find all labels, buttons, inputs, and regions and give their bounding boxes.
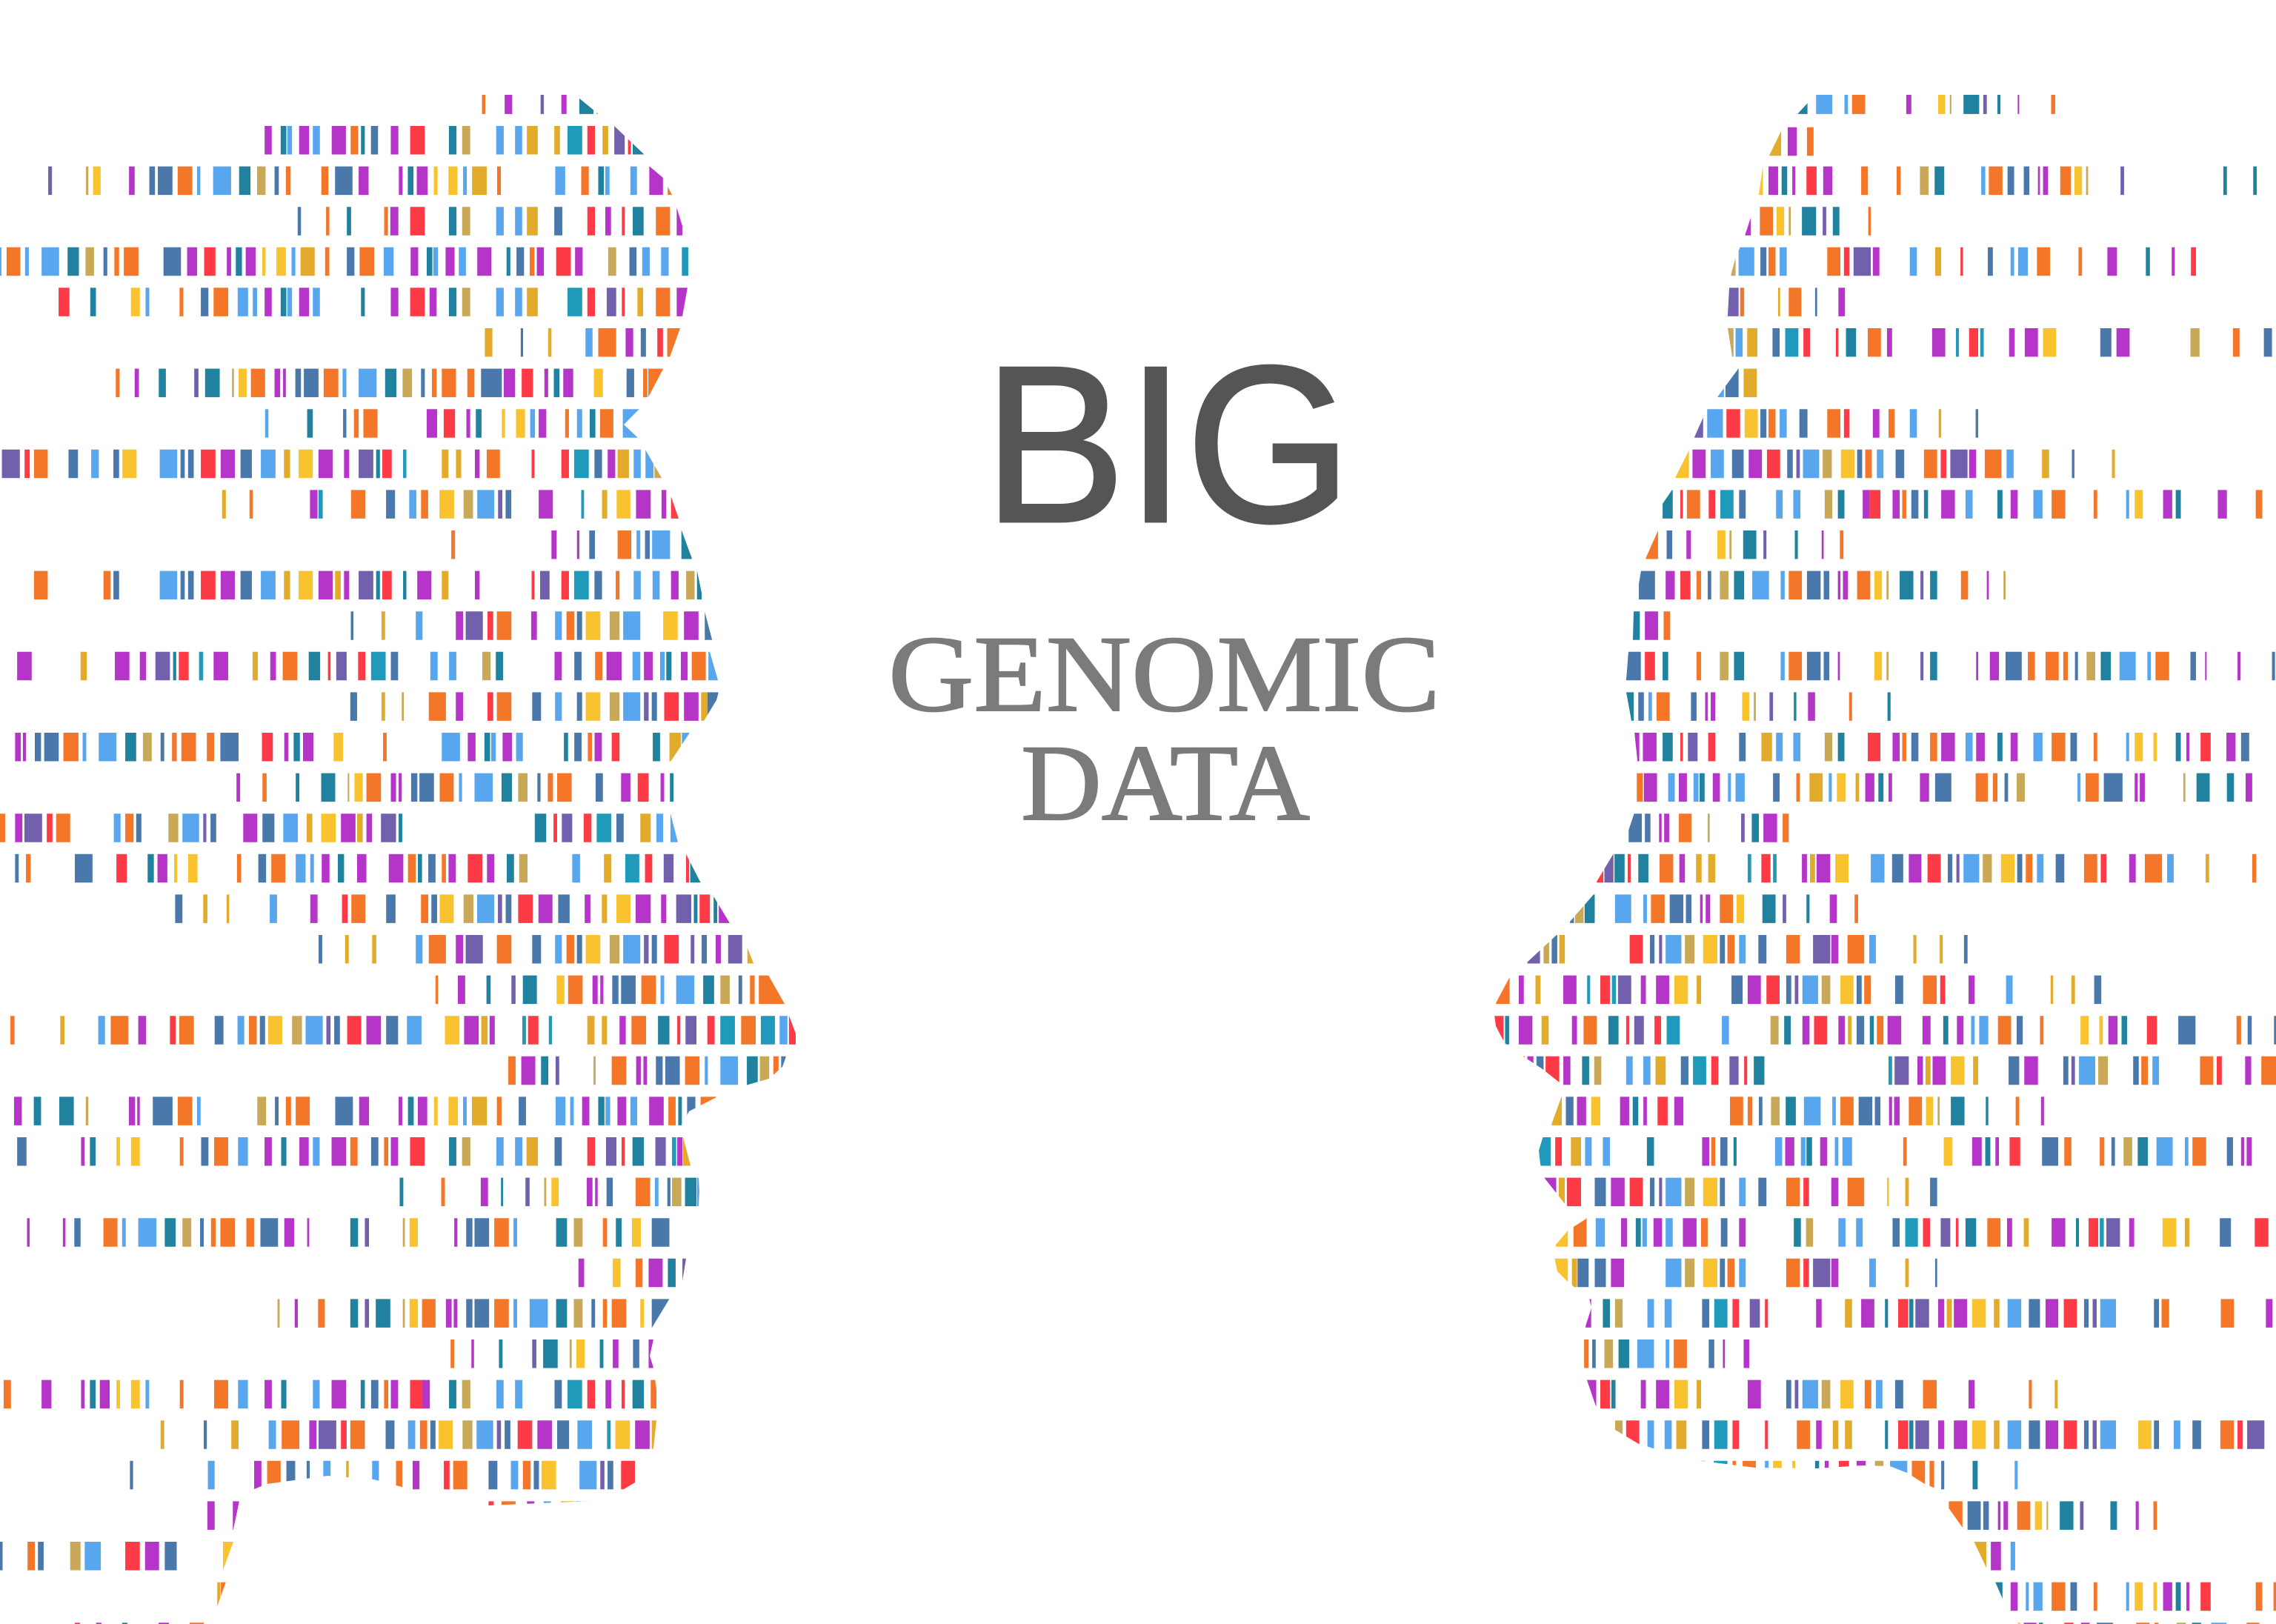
right row 8 (1694, 409, 1978, 438)
left row 36 (0, 1542, 233, 1571)
right row 26 (1539, 1137, 2252, 1166)
left row 20 (175, 894, 730, 923)
right row 3 (1746, 207, 1871, 236)
left row 7 (116, 369, 663, 397)
left face profile made of DNA sequence bars (0, 100, 796, 1624)
right row 25 (1551, 1096, 2044, 1125)
left row 17 (236, 773, 673, 802)
left row 18 (0, 813, 678, 842)
right row 11 (1646, 530, 1843, 559)
right row 17 (1637, 773, 2252, 802)
left row 2 (48, 167, 673, 195)
left row 6 (485, 328, 680, 357)
left row 5 (59, 287, 688, 316)
right row 22 (1496, 976, 2101, 1004)
left row 11 (451, 530, 692, 559)
left row 13 (351, 611, 712, 640)
right row 29 (1554, 1259, 1937, 1287)
right row 7 (1717, 369, 1757, 397)
right row 1 (1768, 127, 1814, 156)
title: BIG: BIG (983, 319, 1352, 569)
right row 24 (1521, 1056, 2276, 1085)
left row 30 (278, 1299, 670, 1328)
left row 24 (508, 1056, 786, 1085)
right row 13 (1633, 611, 1670, 640)
left row 34 (130, 1461, 635, 1489)
right row 12 (1639, 571, 2006, 599)
right row 31 (1584, 1340, 1749, 1368)
right row 32 (1587, 1380, 2057, 1408)
left row 4 (0, 247, 688, 276)
left row 37 (217, 1583, 226, 1607)
right row 9 (1675, 450, 2115, 478)
right row 18 (1628, 813, 1788, 842)
left row 35 (207, 1501, 591, 1530)
left row 33 (161, 1420, 657, 1449)
right row 14 (1626, 652, 2275, 680)
right row 5 (1728, 287, 1845, 316)
left row 9 (2, 450, 662, 478)
left row 19 (15, 854, 701, 882)
left row 1 (264, 126, 644, 154)
right row 20 (1570, 894, 1858, 923)
right row 10 (1663, 490, 2263, 519)
left row 8 (265, 409, 640, 438)
left row 32 (4, 1380, 656, 1408)
left row 12 (34, 571, 702, 599)
right row 15 (1626, 692, 1891, 721)
left row 25 (14, 1096, 716, 1125)
right row 33 (1615, 1420, 2264, 1449)
right row 23 (1494, 1016, 2276, 1045)
left row 26 (17, 1137, 691, 1166)
left row 27 (399, 1178, 699, 1206)
left row 10 (222, 490, 679, 519)
right row 37 (1995, 1583, 2276, 1611)
right row 28 (1556, 1218, 2269, 1247)
left row 29 (579, 1259, 686, 1287)
right row 2 (1759, 167, 2257, 195)
left row 23 (10, 1016, 796, 1045)
left row 14 (17, 652, 718, 680)
left row 21 (319, 935, 753, 963)
left row 38 (75, 1623, 204, 1624)
right row 30 (1585, 1299, 2272, 1328)
left row 15 (350, 692, 718, 721)
right row 21 (1528, 935, 1968, 963)
right row 34 (1691, 1461, 2017, 1489)
left row 28 (27, 1218, 670, 1247)
right row 27 (1543, 1178, 1937, 1206)
right row 0 (1797, 85, 2055, 114)
right row 16 (1634, 733, 2249, 762)
subtitle line: DATA: DATA (1021, 722, 1310, 843)
right row 35 (1943, 1501, 2157, 1530)
left row 31 (450, 1340, 653, 1368)
left row 0 (482, 95, 599, 114)
right row 4 (1731, 247, 2196, 276)
right row 38 (2016, 1623, 2259, 1624)
right face profile made of DNA sequence bars (1494, 100, 2276, 1624)
right row 19 (1597, 854, 2256, 882)
left row 3 (298, 207, 682, 236)
left row 16 (15, 733, 690, 762)
right row 36 (1973, 1542, 2015, 1571)
left row 22 (436, 976, 785, 1004)
right row 6 (1728, 328, 2272, 357)
subtitle line: GENOMIC: GENOMIC (888, 613, 1440, 734)
